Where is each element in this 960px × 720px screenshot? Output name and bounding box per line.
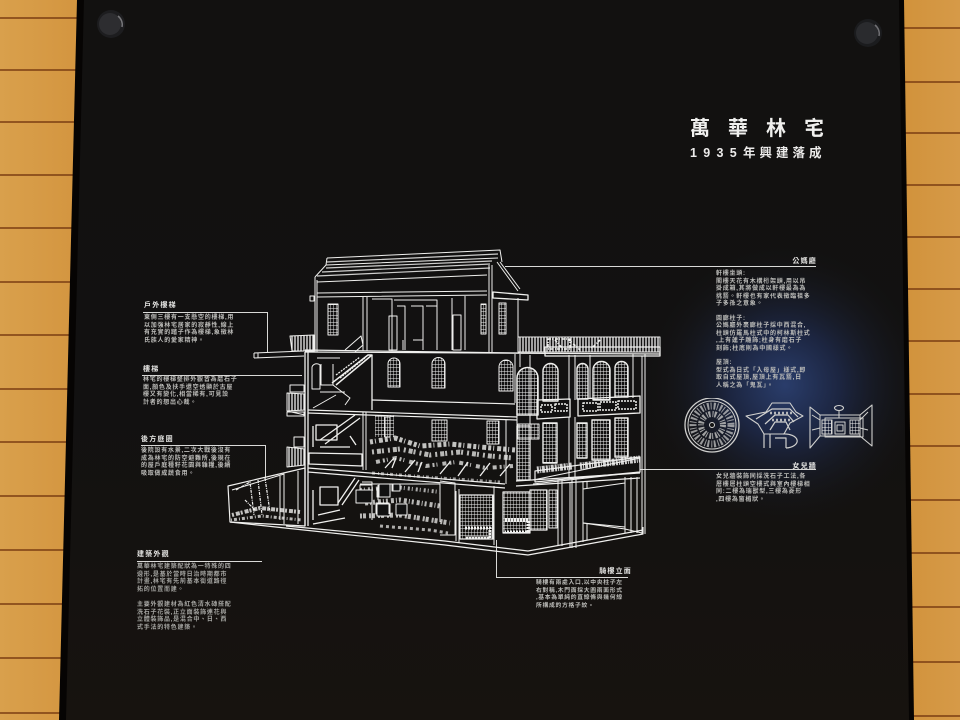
text: outdoor stair <box>144 300 234 344</box>
body: building exterior: 計畫,林宅有先前基本街道路徑 <box>137 579 227 585</box>
body: outdoor stair: 東側三樓有一支懸空的樓梯,用 <box>144 315 234 321</box>
heading: staircase: 樓梯 <box>143 366 159 373</box>
body: building exterior: 邊形,是基於當時日治時期都市 <box>137 572 227 578</box>
second floor windows <box>388 358 628 415</box>
body: building exterior: 式手法的特色建築。 <box>137 624 198 630</box>
body: parapet: 層樓層柱頭空樓式與室內樓梯相 <box>716 482 811 488</box>
subtitle: 1935年興建落成 <box>690 146 826 160</box>
roof <box>310 250 528 352</box>
body: parapet: 女兒牆裝飾同採洗石子工法,各 <box>716 474 806 480</box>
text: arcade elevation <box>536 566 632 608</box>
body: building exterior: 洗石子花裝,正立面裝飾連花與 <box>137 610 227 616</box>
body: rear garden: 後院設有水景,二次大戰後沒有 <box>141 448 231 454</box>
heading: outdoor stair: 戶外樓梯 <box>144 302 177 309</box>
body: ancestral hall: 挑簷。軒樓也有家代表徵臨祖多 <box>716 294 811 300</box>
body: ancestral hall: 型式為日式「入母屋」樣式,即 <box>716 368 806 374</box>
body: arcade elevation: 所構成的方格子紋。 <box>536 602 594 608</box>
icon: column capital <box>746 402 804 449</box>
text: ancestral hall <box>716 256 817 388</box>
roof terrace balustrade <box>515 337 660 534</box>
icon: interior elevation <box>809 404 873 449</box>
left side balconies <box>287 385 362 467</box>
body: outdoor stair: 有充實的踏子作為樓梯,象徵林 <box>144 330 234 336</box>
body: arcade elevation <box>536 578 623 608</box>
heading: building exterior: 建築外觀 <box>137 551 170 558</box>
body: ancestral hall: 取自式屋頂,屋頂上有瓦簷,日 <box>716 375 802 381</box>
body: rear garden: 吸取做成蔬食用。 <box>141 470 195 476</box>
body: arcade elevation: 右對稱,木門面採大圓兩面形式 <box>536 588 623 594</box>
body: ancestral hall: 掛成箱,其將做成以軒樓最為為 <box>716 286 806 292</box>
rear garden <box>228 468 305 526</box>
body: staircase <box>143 376 238 406</box>
body: ancestral hall: 屋頂: <box>716 360 732 366</box>
left balcony and ledge <box>254 335 314 358</box>
body: ancestral hall: 圓廊柱子: <box>716 316 746 322</box>
body: ancestral hall <box>716 269 811 388</box>
second floor balconies <box>537 396 640 419</box>
text: building exterior <box>137 550 232 630</box>
body: building exterior: 立體裝飾品,是混合中、日、西 <box>137 617 227 623</box>
body: rear garden <box>141 446 231 476</box>
body: arcade elevation: 騎樓有兩處入口,以中央柱子左 <box>536 580 623 586</box>
front balustrade and arcade <box>516 457 640 486</box>
body: parapet <box>716 472 811 502</box>
ground floor interior <box>356 477 642 548</box>
body: outdoor stair: 氏族人的愛家精神。 <box>144 338 205 344</box>
text: staircase <box>143 364 238 406</box>
base slab <box>230 522 643 555</box>
body: ancestral hall: 公媽廳外裹廊柱子採中西混合, <box>716 323 806 329</box>
body: ancestral hall: ,上有蓮子雕飾;柱身有磨石子 <box>716 338 802 344</box>
body: building exterior: 拓的位置而建。 <box>137 586 184 592</box>
staircases <box>312 355 372 524</box>
body: staircase: 面,顏色及扶手還空透顯於古屋 <box>143 384 233 390</box>
body: ancestral hall: 子多孫之意象。 <box>716 301 763 307</box>
body: staircase: 林宅的樓梯整排外觀皆為磨石子 <box>143 377 238 383</box>
body: building exterior: 主要外觀建材為紅色清水磚搭配 <box>137 602 232 608</box>
body: ancestral hall: 刻飾;柱底則為中國樣式。 <box>716 346 793 352</box>
body: building exterior <box>137 562 232 630</box>
body: ancestral hall: 人稱之為「鬼瓦」。 <box>716 382 774 388</box>
icon: round stone medallion <box>684 398 740 453</box>
body: staircase: 樓又有變化,相當稀有,可見設 <box>143 392 229 398</box>
body: rear garden: 的屋戶庭種籽花園與雜糧,後續 <box>141 463 231 469</box>
title: 萬華林宅 <box>690 118 842 140</box>
text: rear garden <box>141 434 231 476</box>
third floor <box>305 265 660 354</box>
body: outdoor stair <box>144 313 234 344</box>
body: parapet: 同:二樓為瑞獸型,三樓為菱形 <box>716 489 802 495</box>
heading: arcade elevation: 騎樓立面 <box>599 568 632 575</box>
body: arcade elevation: ,基本為單純的直線條與幾何線 <box>536 595 623 601</box>
body: ancestral hall: 閣樓天花有木構桁架頭,用以吊 <box>716 278 806 284</box>
heading: parapet: 女兒牆 <box>792 463 817 470</box>
floor lines and structural walls <box>298 352 576 548</box>
first floor interior with furniture <box>370 415 628 482</box>
body: ancestral hall: 軒樓坐頭: <box>716 271 746 277</box>
heading: ancestral hall: 公媽廳 <box>792 258 817 265</box>
body: outdoor stair: 以加強林宅居家的寂靜性,線上 <box>144 322 234 328</box>
text: parapet <box>716 462 817 502</box>
body: rear garden: 成為林宅的防空避難所,後現在 <box>141 456 231 462</box>
body: ancestral hall: 柱頭仿羅馬柱式中的柯林斯柱式 <box>716 330 811 336</box>
body: staircase: 計者的想出心裁。 <box>143 400 197 406</box>
body: parapet: ,四樓為窗楣狀。 <box>716 496 766 502</box>
body: building exterior: 萬華林宅建築配狀為一特殊的四 <box>137 564 232 570</box>
heading: rear garden: 後方庭園 <box>141 436 174 443</box>
